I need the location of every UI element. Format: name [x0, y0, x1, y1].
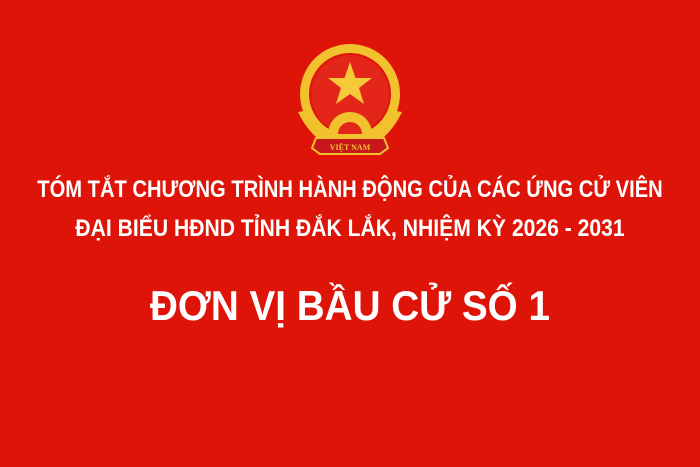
ribbon: VIỆT NAM [330, 143, 371, 152]
title line 2: ĐẠI BIỂU HĐND TỈNH ĐẮK LẮK, NHIỆM KỲ 2026 - 2031 [75, 215, 625, 242]
title line 1: TÓM TẮT CHƯƠNG TRÌNH HÀNH ĐỘNG CỦA CÁC ỨNG CỬ VIÊN [37, 176, 663, 203]
emblem outer wreath [298, 44, 402, 146]
emblem [298, 44, 402, 155]
icon: star [328, 62, 372, 104]
heading: electoral unit: ĐƠN VỊ BẦU CỬ SỐ 1 [150, 282, 550, 329]
icon: gear [328, 112, 372, 134]
